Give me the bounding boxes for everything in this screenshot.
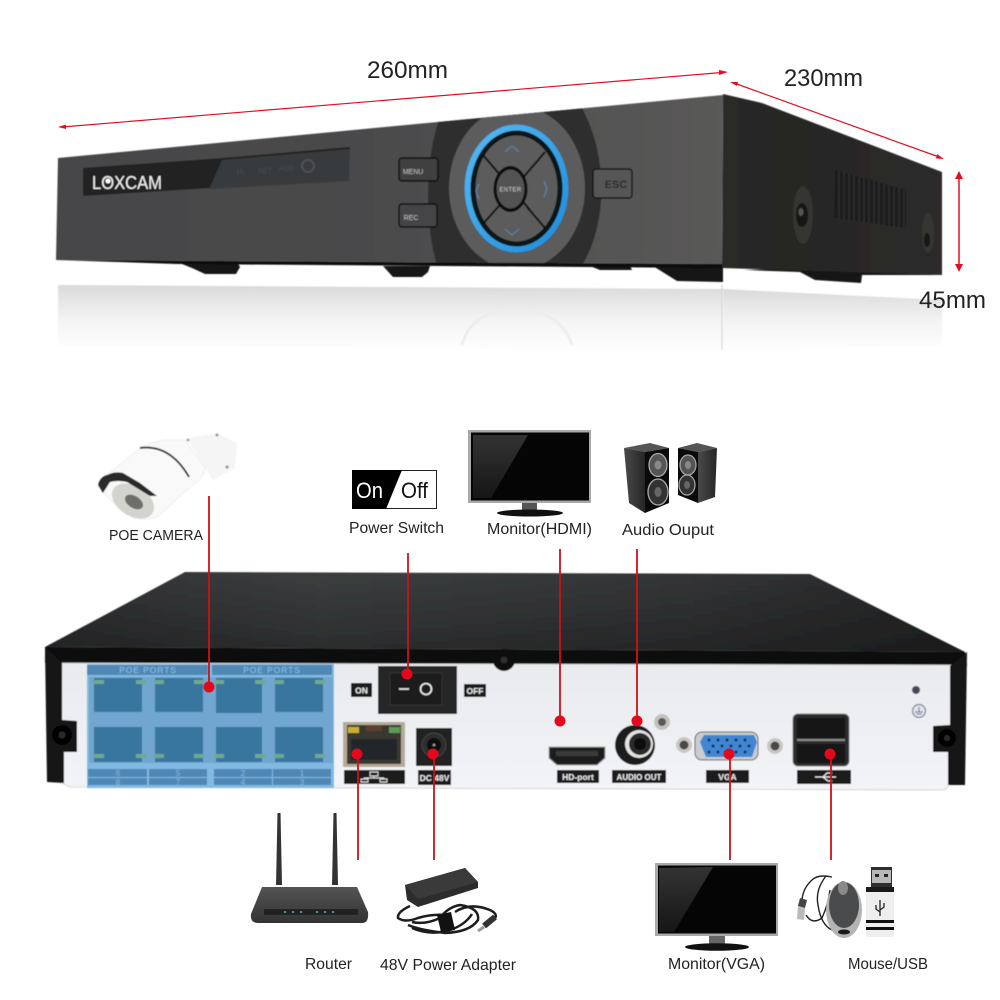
icon: mouse <box>797 876 862 938</box>
menu button: MENU <box>403 169 423 176</box>
status display: NET <box>258 168 273 175</box>
VGA screw right <box>767 738 783 754</box>
blue ring <box>470 130 563 247</box>
floor reflection <box>58 285 942 352</box>
esc button: ESC <box>605 179 627 191</box>
front bottom edge <box>56 260 722 268</box>
VGA label <box>706 770 749 783</box>
right frame <box>933 652 967 785</box>
DC power jack <box>416 728 452 766</box>
rec button: REC <box>404 215 418 222</box>
status display: HL <box>237 169 246 176</box>
direction key dividers <box>482 152 545 228</box>
left frame <box>45 647 77 783</box>
port numbers: 8 <box>116 778 121 787</box>
port numbers <box>116 769 305 787</box>
camera hood <box>98 472 157 496</box>
enter key <box>494 166 528 212</box>
connector line: router <box>352 748 362 860</box>
esc button <box>593 169 632 198</box>
audio jack <box>615 725 655 765</box>
label: Audio Ouput: Audio Ouput <box>622 522 715 539</box>
audio out label: AUDIO OUT <box>617 773 662 782</box>
status display: HDD <box>279 166 294 173</box>
front panel <box>56 95 723 264</box>
LAN label <box>344 770 405 784</box>
status hole <box>912 686 920 694</box>
HDMI port <box>549 747 605 765</box>
side rubber foot hole right <box>922 213 934 253</box>
left rack screw <box>52 725 72 745</box>
icon: on off switch <box>352 470 436 509</box>
port grid <box>89 677 333 763</box>
USB label <box>797 770 851 784</box>
icon: router <box>251 813 368 923</box>
logo strip <box>83 158 223 196</box>
port numbers: 3 <box>300 778 305 787</box>
dark dial surround <box>428 100 601 268</box>
menu button <box>399 158 438 181</box>
label: Monitor(VGA): Monitor(VGA) <box>668 956 765 973</box>
DC 48V label: DC 48V <box>420 773 450 783</box>
dimension arrow: width 260mm <box>58 70 728 129</box>
dial assembly <box>428 100 601 270</box>
port numbers: 5 <box>176 769 181 778</box>
power switch <box>378 666 457 714</box>
port numbers: 4 <box>241 778 246 787</box>
side rubber foot hole left <box>793 186 813 244</box>
dial plate <box>449 106 585 270</box>
icon: HDMI monitor <box>468 430 591 516</box>
left speaker <box>624 443 669 513</box>
connector line: audio <box>632 549 642 726</box>
icon: on off switch: Off <box>401 478 429 503</box>
icon: power adapter <box>398 868 496 933</box>
connector line: HDMI <box>554 549 566 726</box>
RJ45 openings <box>94 678 323 762</box>
DC 48V label <box>418 770 451 785</box>
port numbers: 1 <box>300 769 305 778</box>
dimension arrow: depth 230mm <box>730 82 944 159</box>
VGA label: VGA <box>718 772 737 782</box>
connector line: adapter <box>428 748 438 860</box>
icon: speakers <box>624 443 717 513</box>
top screw <box>493 649 515 671</box>
icon: on off switch: On <box>356 478 383 503</box>
USB ports <box>793 714 849 766</box>
label: 230mm: 230mm <box>784 65 863 92</box>
rear view of recorder <box>45 572 967 790</box>
port numbers: 6 <box>116 769 121 778</box>
connector line: power switch <box>402 553 412 680</box>
recorder feet <box>177 262 942 283</box>
recorder side face <box>722 94 942 275</box>
connector line: VGA <box>724 748 734 860</box>
ON label <box>351 683 372 697</box>
ground symbol <box>912 704 926 718</box>
label: POE CAMERA: POE CAMERA <box>109 527 203 544</box>
direction arrows <box>476 146 547 235</box>
rear panel <box>62 663 951 790</box>
lid shading <box>45 572 965 652</box>
dial assembly: ENTER <box>499 188 522 194</box>
audio screw <box>654 714 670 730</box>
front view of recorder <box>56 94 942 352</box>
status display <box>210 147 350 189</box>
OFF label: OFF <box>466 686 484 696</box>
rec button <box>399 204 437 227</box>
OFF label <box>464 684 486 697</box>
connector line: USB <box>824 748 836 860</box>
connector line: POE camera <box>204 496 214 692</box>
audio out label <box>612 770 666 783</box>
right rack screw <box>938 729 956 747</box>
VGA screw left <box>676 737 692 753</box>
camera front <box>106 476 160 526</box>
label: 45mm: 45mm <box>919 287 986 314</box>
label: Monitor(HDMI): Monitor(HDMI) <box>487 521 592 538</box>
black rear band <box>45 647 967 666</box>
logo strip: LOXCAM <box>92 173 162 193</box>
camera barrel <box>98 440 205 519</box>
LAN port <box>343 722 405 767</box>
icon: POE camera <box>98 433 237 526</box>
label: 48V Power Adapter: 48V Power Adapter <box>380 957 517 974</box>
HD-port label: HD-port <box>562 772 594 782</box>
lid <box>45 572 965 652</box>
icon: USB stick <box>866 867 894 937</box>
dimension arrow: height 45mm <box>955 171 963 272</box>
ON label: ON <box>355 686 368 696</box>
POE PORTS headers <box>87 665 332 675</box>
label: Router: Router <box>305 956 353 973</box>
POE PORTS headers: POE PORTS <box>243 665 301 675</box>
label: Power Switch: Power Switch <box>349 520 444 537</box>
port LEDs <box>93 680 325 758</box>
PoE ports block <box>87 664 334 788</box>
label: Mouse/USB: Mouse/USB <box>848 956 928 973</box>
port numbers: 2 <box>241 769 246 778</box>
HD-port label <box>557 770 599 783</box>
icon: VGA monitor <box>655 863 778 951</box>
label: 260mm: 260mm <box>367 57 448 84</box>
POE PORTS headers: POE PORTS <box>119 665 177 675</box>
side ventilation slots <box>834 170 906 228</box>
port numbers: 7 <box>176 778 181 787</box>
port number strips <box>88 769 331 785</box>
VGA port <box>695 732 758 760</box>
camera band <box>140 448 189 477</box>
right speaker <box>678 443 717 503</box>
camera bracket <box>186 433 237 480</box>
